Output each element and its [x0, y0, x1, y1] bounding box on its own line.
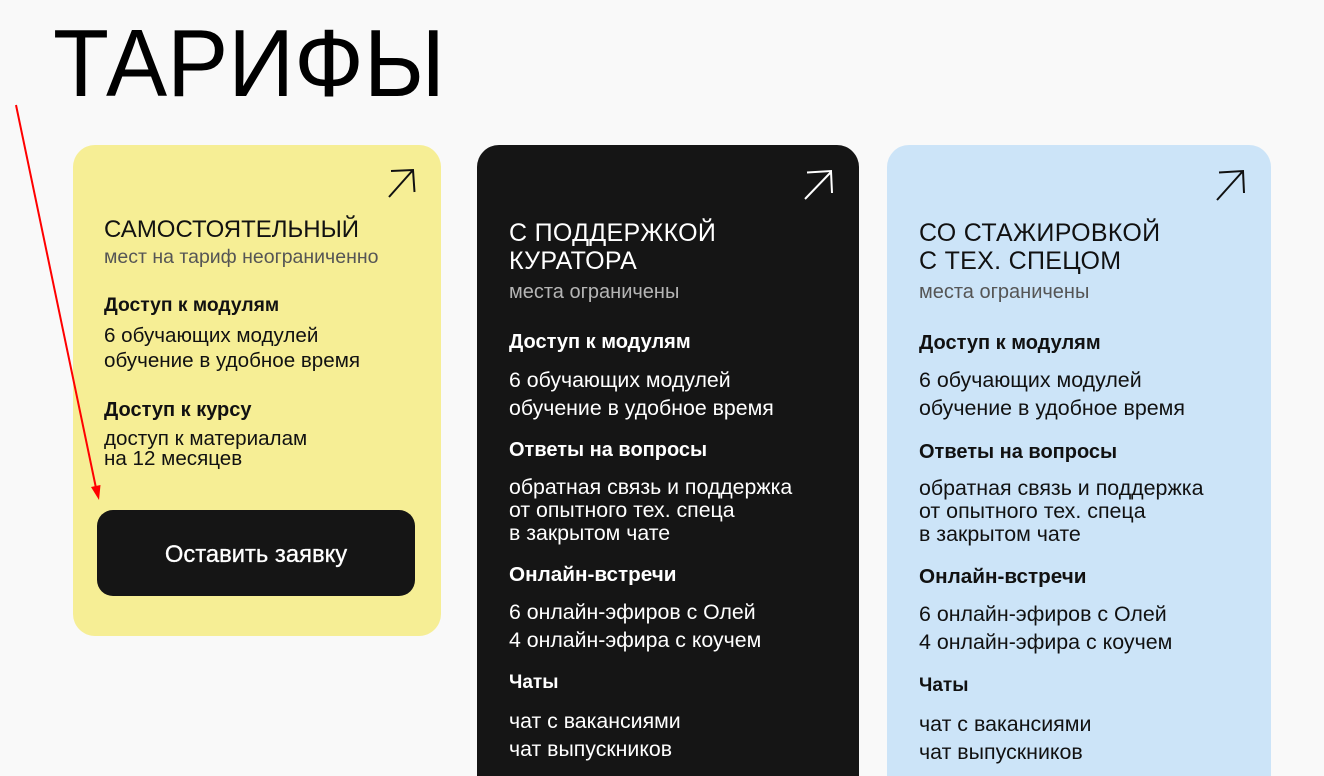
module access: обучение в удобное время	[509, 396, 774, 420]
panel: self-paced tariff	[73, 145, 441, 636]
answers: в закрытом чате	[919, 522, 1081, 546]
module access: Доступ к модулям	[509, 331, 691, 353]
module access: Доступ к модулям	[104, 295, 279, 316]
chats: чат с вакансиями	[919, 712, 1091, 736]
arrow: red pointer to button	[15, 104, 100, 500]
heading	[509, 218, 716, 275]
answers: Ответы на вопросы	[509, 439, 707, 461]
heading: САМОСТОЯТЕЛЬНЫЙ	[104, 216, 359, 243]
online meetings	[509, 563, 761, 652]
chats: чат выпускников	[509, 737, 672, 761]
subheading: мест на тариф неограниченно	[104, 246, 378, 268]
chats	[919, 675, 1091, 764]
online meetings: 6 онлайн-эфиров с Олей	[919, 602, 1167, 626]
chats	[509, 672, 681, 761]
online meetings: 4 онлайн-эфира с коучем	[509, 628, 761, 652]
course access	[104, 399, 307, 470]
subheading: места ограничены	[919, 281, 1089, 303]
answers: обратная связь и поддержка	[919, 476, 1204, 500]
answers: обратная связь и поддержка	[509, 475, 792, 499]
answers: Ответы на вопросы	[919, 441, 1117, 463]
module access: Доступ к модулям	[919, 332, 1101, 354]
chats: чат с вакансиями	[509, 709, 681, 733]
answers	[509, 439, 792, 545]
module access	[509, 331, 774, 420]
icon: arrow	[388, 169, 416, 198]
button: Оставить заявку	[165, 541, 347, 568]
icon: arrow	[804, 170, 833, 200]
answers: в закрытом чате	[509, 521, 670, 545]
module access	[919, 332, 1185, 420]
heading: СО СТАЖИРОВКОЙ	[919, 219, 1160, 247]
panel: internship tariff	[887, 145, 1271, 776]
online meetings: 6 онлайн-эфиров с Олей	[509, 600, 756, 624]
chats: чат выпускников	[919, 740, 1083, 764]
answers	[919, 441, 1204, 546]
online meetings: Онлайн-встречи	[919, 565, 1087, 588]
title: ТАРИФЫ	[53, 10, 445, 117]
heading: С ПОДДЕРЖКОЙ	[509, 219, 716, 247]
online meetings: Онлайн-встречи	[509, 563, 677, 586]
answers: от опытного тех. спеца	[919, 499, 1146, 523]
course access: доступ к материалам	[104, 427, 307, 450]
course access: Доступ к курсу	[104, 399, 252, 421]
online meetings	[919, 565, 1172, 654]
heading: С ТЕХ. СПЕЦОМ	[919, 247, 1121, 275]
module access: обучение в удобное время	[104, 349, 360, 372]
heading: КУРАТОРА	[509, 247, 637, 275]
module access: 6 обучающих модулей	[509, 368, 731, 392]
online meetings: 4 онлайн-эфира с коучем	[919, 630, 1172, 654]
module access: обучение в удобное время	[919, 396, 1185, 420]
module access: 6 обучающих модулей	[104, 324, 318, 347]
heading	[919, 218, 1160, 275]
module access	[104, 295, 360, 372]
button	[97, 510, 415, 596]
answers: от опытного тех. спеца	[509, 498, 735, 522]
panel: curator support tariff	[477, 145, 859, 776]
chats: Чаты	[919, 675, 968, 696]
subheading: места ограничены	[509, 281, 679, 303]
chats: Чаты	[509, 672, 558, 693]
module access: 6 обучающих модулей	[919, 368, 1142, 392]
course access: на 12 месяцев	[104, 447, 242, 470]
icon: arrow	[1216, 170, 1245, 201]
